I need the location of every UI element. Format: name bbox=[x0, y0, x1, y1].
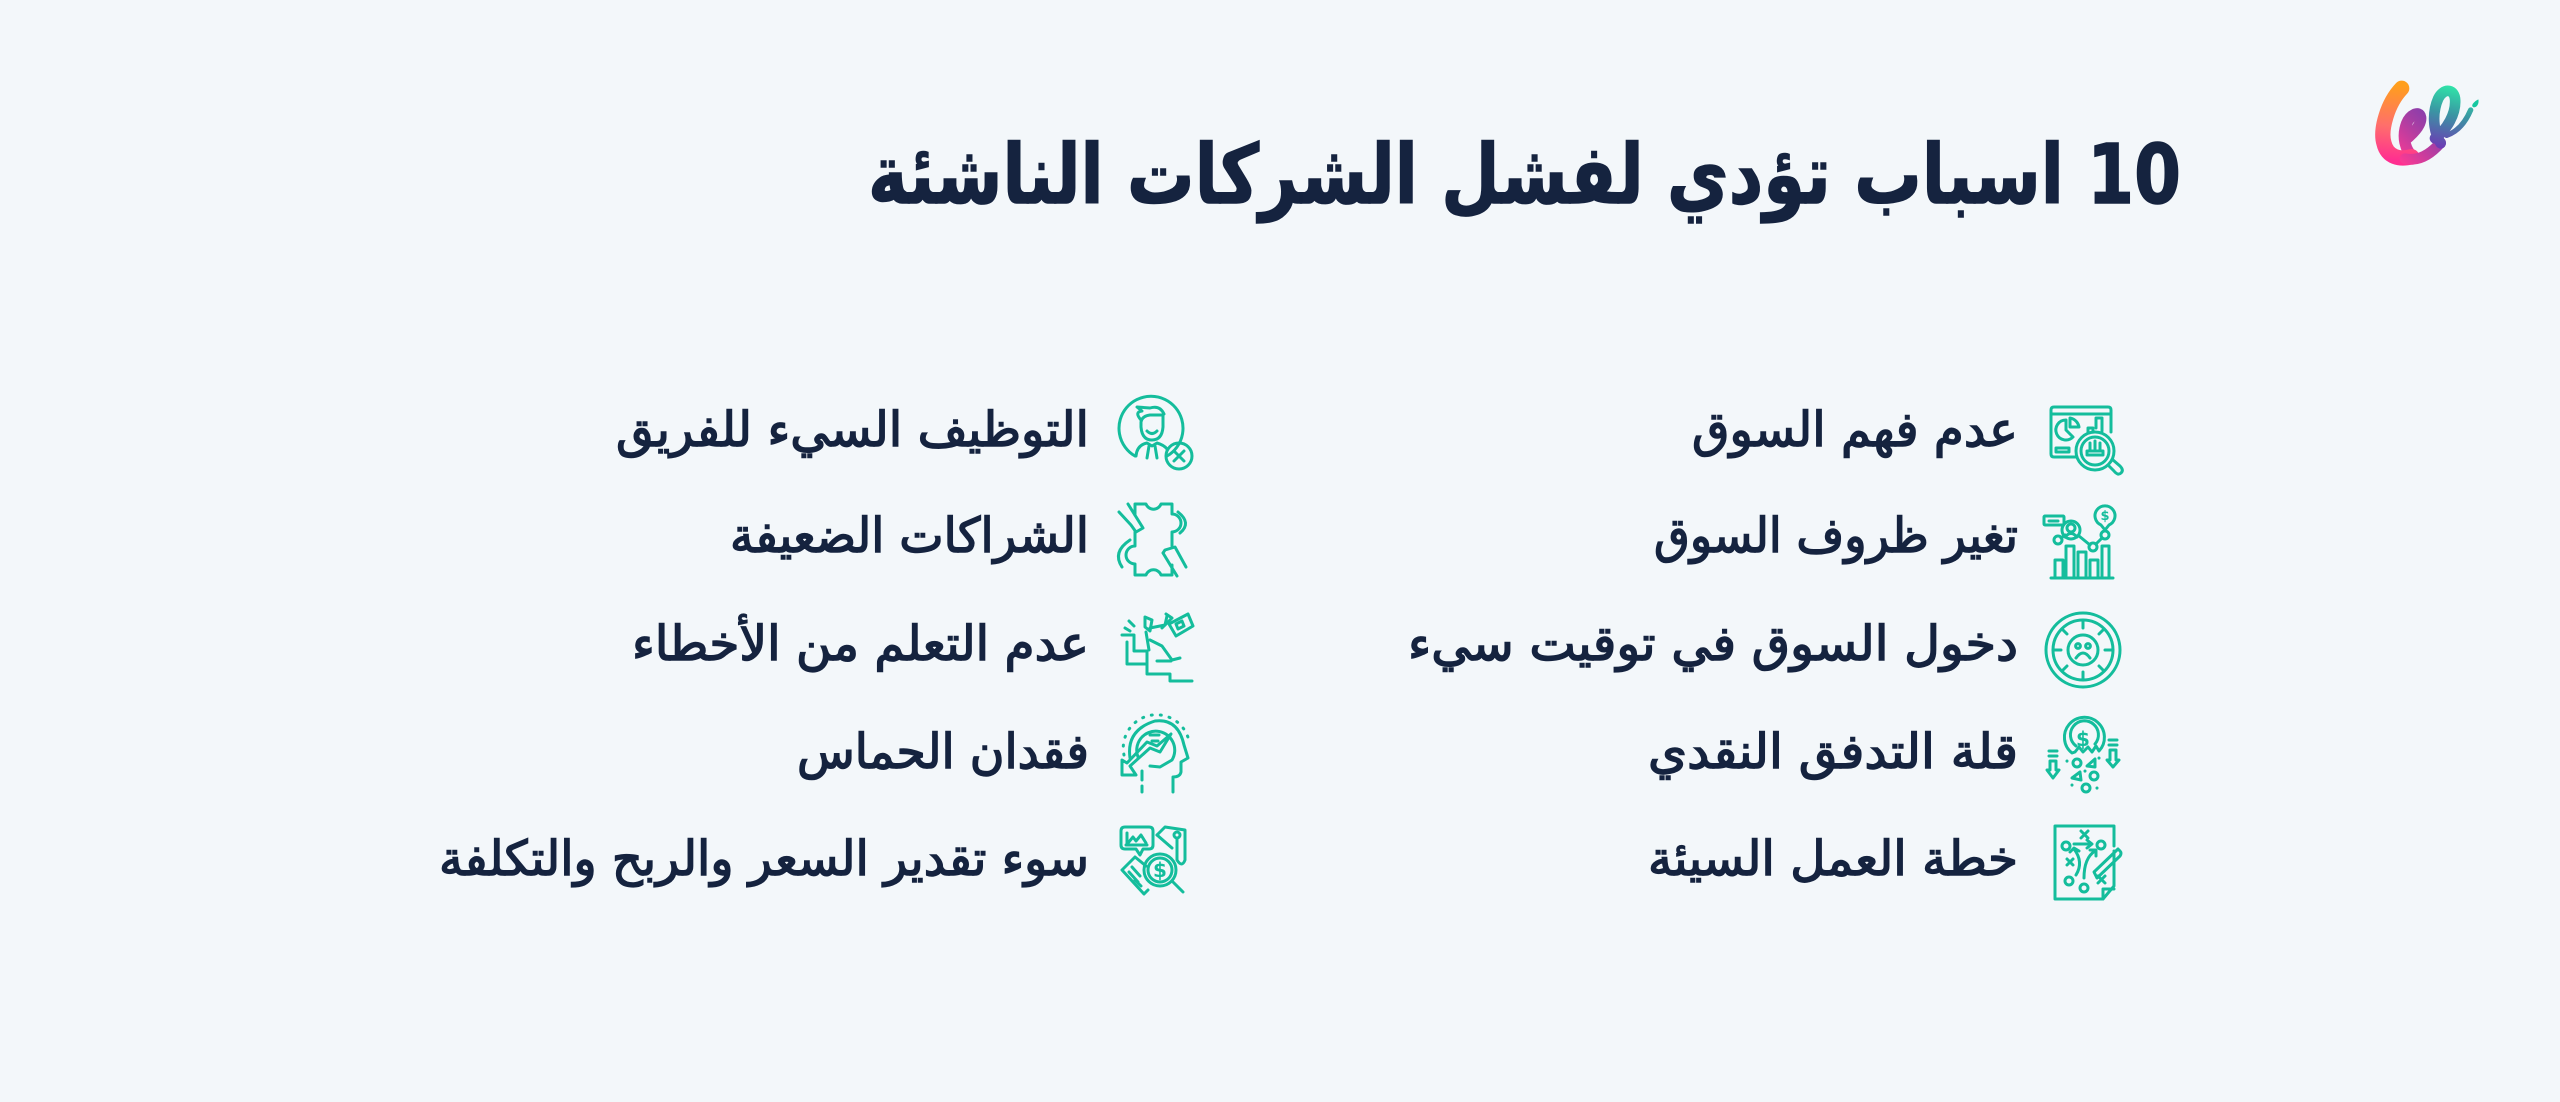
icon: rejected employee bbox=[1119, 396, 1192, 469]
title: 10 اسباب تؤدي لفشل الشركات الناشئة bbox=[868, 128, 2181, 223]
left column item 1: poor team hiring bbox=[616, 396, 1192, 469]
left column item 4: loss of passion bbox=[797, 715, 1189, 792]
label: قلة التدفق النقدي bbox=[1648, 724, 2018, 780]
icon: puzzle partnership bbox=[1118, 504, 1186, 576]
icon: market chart bbox=[2044, 506, 2115, 578]
icon: falling person bbox=[1122, 614, 1193, 681]
right column item 3: bad timing bbox=[1408, 613, 2120, 687]
label: دخول السوق في توقيت سيء bbox=[1408, 616, 2018, 672]
icon: market chart: $ bbox=[2100, 509, 2110, 524]
icon: falling money: $ bbox=[2076, 727, 2090, 751]
right column item 5: bad business plan bbox=[1648, 826, 2121, 899]
label: سوء تقدير السعر والربح والتكلفة bbox=[439, 831, 1089, 887]
icon: market analysis bbox=[2051, 407, 2122, 474]
label: خطة العمل السيئة bbox=[1648, 831, 2018, 887]
icon: head with falling arrow bbox=[1122, 715, 1189, 792]
right column item 1: market misunderstanding bbox=[1692, 402, 2122, 474]
label: عدم التعلم من الأخطاء bbox=[632, 613, 1089, 672]
icon: strategy plan bbox=[2055, 826, 2121, 899]
icon: price analysis: $ bbox=[1153, 858, 1167, 882]
label: فقدان الحماس bbox=[797, 724, 1089, 780]
logo bbox=[2383, 88, 2479, 159]
label: عدم فهم السوق bbox=[1692, 402, 2018, 458]
left column item 3: not learning from mistakes bbox=[632, 613, 1193, 681]
left column item 2: weak partnerships bbox=[730, 504, 1186, 576]
label: التوظيف السيء للفريق bbox=[616, 402, 1089, 458]
label: تغير ظروف السوق bbox=[1654, 508, 2018, 564]
icon: falling money bbox=[2047, 717, 2119, 792]
icon: price analysis bbox=[1121, 827, 1185, 894]
label: الشراكات الضعيفة bbox=[730, 508, 1089, 564]
right column item 2: changing market conditions bbox=[1654, 506, 2115, 578]
right column item 4: low cash flow bbox=[1648, 717, 2119, 792]
icon: sad gauge bbox=[2046, 613, 2120, 687]
left column item 5: poor pricing and cost estimates bbox=[439, 827, 1185, 894]
